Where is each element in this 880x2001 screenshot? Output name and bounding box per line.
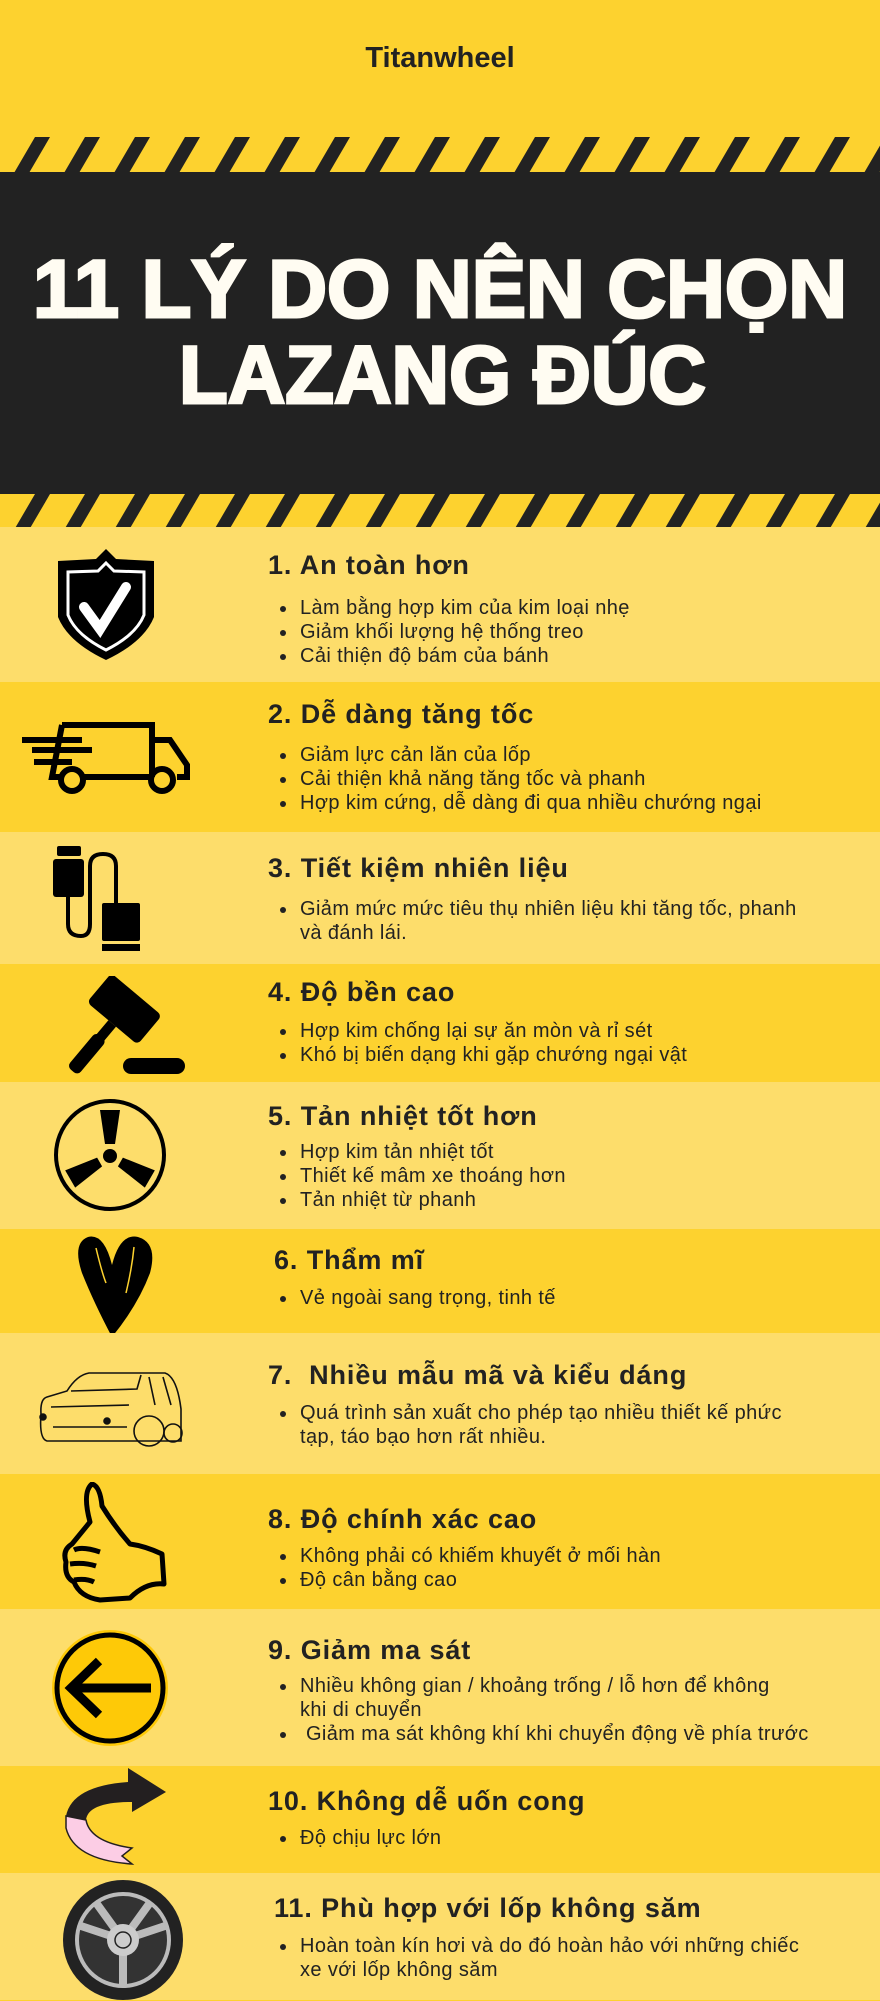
icon: charger — [53, 846, 140, 951]
title banner: LAZANG ĐÚC — [179, 330, 706, 421]
icon: curved arrow — [65, 1768, 166, 1865]
bullets 6: Vẻ ngoài sang trọng, tinh tế — [300, 1287, 556, 1309]
heading 3: 3. Tiết kiệm nhiên liệu — [268, 853, 569, 883]
bullets 9: Nhiều không gian / khoảng trống / lỗ hơn để không — [300, 1675, 770, 1697]
bullets 9 — [280, 1674, 809, 1745]
bullets 4: Khó bị biến dạng khi gặp chướng ngại vật — [300, 1044, 687, 1066]
heading 9: 9. Giảm ma sát — [268, 1635, 471, 1665]
bullets 5: Hợp kim tản nhiệt tốt — [300, 1141, 494, 1163]
heading 2: 2. Dễ dàng tăng tốc — [268, 699, 534, 729]
bullets 4: Hợp kim chống lại sự ăn mòn và rỉ sét — [300, 1020, 653, 1042]
bullets 5 — [280, 1141, 566, 1211]
icon: heart — [78, 1236, 152, 1333]
bullets 4 — [280, 1020, 687, 1066]
bullets 3: và đánh lái. — [300, 922, 407, 944]
bullets 1: Làm bằng hợp kim của kim loại nhẹ — [300, 597, 630, 619]
bullets 1: Cải thiện độ bám của bánh — [300, 645, 549, 667]
bullets 1 — [280, 596, 630, 667]
icon: tire — [63, 1880, 183, 2000]
bullets 8: Độ cân bằng cao — [300, 1569, 457, 1591]
icon: gavel — [69, 976, 185, 1074]
heading 8: 8. Độ chính xác cao — [268, 1504, 537, 1534]
heading 11: 11. Phù hợp với lốp không săm — [274, 1893, 702, 1923]
heading 7: 7. Nhiều mẫu mã và kiểu dáng — [268, 1360, 687, 1390]
panel 9 — [0, 1609, 880, 1766]
panel 4 — [0, 964, 880, 1082]
bullets 3: Giảm mức mức tiêu thụ nhiên liệu khi tăng tốc, phanh — [300, 898, 797, 920]
panel 7 — [0, 1333, 880, 1474]
heading 6: 6. Thẩm mĩ — [274, 1245, 424, 1275]
bullets 7: Quá trình sản xuất cho phép tạo nhiều thiết kế phức — [300, 1402, 782, 1424]
bullets 3 — [280, 898, 797, 944]
icon: car — [39, 1372, 183, 1447]
panel 5 — [0, 1082, 880, 1229]
heading 1: 1. An toàn hơn — [268, 550, 470, 580]
title banner — [0, 172, 880, 494]
panel 1 — [0, 527, 880, 682]
panel 2 — [0, 682, 880, 832]
icon: shield — [58, 549, 154, 660]
panel 6 — [0, 1229, 880, 1333]
heading 5: 5. Tản nhiệt tốt hơn — [268, 1101, 538, 1131]
panel 10 — [0, 1766, 880, 1873]
bullets 2: Hợp kim cứng, dễ dàng đi qua nhiều chướng ngại — [300, 792, 762, 814]
bullets 9: khi di chuyển — [300, 1699, 422, 1721]
bullets 5: Tản nhiệt từ phanh — [300, 1189, 476, 1211]
bullets 2 — [280, 744, 762, 814]
heading 10: 10. Không dễ uốn cong — [268, 1786, 585, 1816]
icon: fan — [54, 1099, 166, 1211]
title banner: 11 LÝ DO NÊN CHỌN — [33, 243, 847, 335]
bullets 1: Giảm khối lượng hệ thống treo — [300, 621, 584, 643]
bullets 9: Giảm ma sát không khí khi chuyển động về phía trước — [306, 1723, 809, 1745]
bullets 11 — [280, 1935, 799, 1981]
panel 3 — [0, 832, 880, 964]
bullets 7: tạp, táo bạo hơn rất nhiều. — [300, 1426, 546, 1448]
bullets 2: Giảm lực cản lăn của lốp — [300, 744, 531, 766]
brand name: Titanwheel — [365, 42, 515, 74]
panel 11 — [0, 1873, 880, 2000]
icon: arrow sign — [52, 1630, 168, 1746]
bullets 7 — [280, 1402, 782, 1448]
bullets 8: Không phải có khiếm khuyết ở mối hàn — [300, 1545, 661, 1567]
bullets 5: Thiết kế mâm xe thoáng hơn — [300, 1165, 566, 1187]
bullets 11: Hoàn toàn kín hơi và do đó hoàn hảo với những chiếc — [300, 1935, 799, 1957]
bullets 8 — [280, 1545, 661, 1591]
icon: thumbs up — [62, 1482, 166, 1602]
icon: truck — [22, 722, 190, 794]
panel 8 — [0, 1474, 880, 1609]
bottom hazard stripes — [16, 494, 880, 527]
bullets 11: xe với lốp không săm — [300, 1959, 498, 1981]
heading 4: 4. Độ bền cao — [268, 977, 455, 1007]
bullets 2: Cải thiện khả năng tăng tốc và phanh — [300, 768, 646, 790]
top hazard stripes — [14, 137, 880, 172]
bullets 10: Độ chịu lực lớn — [300, 1827, 441, 1849]
